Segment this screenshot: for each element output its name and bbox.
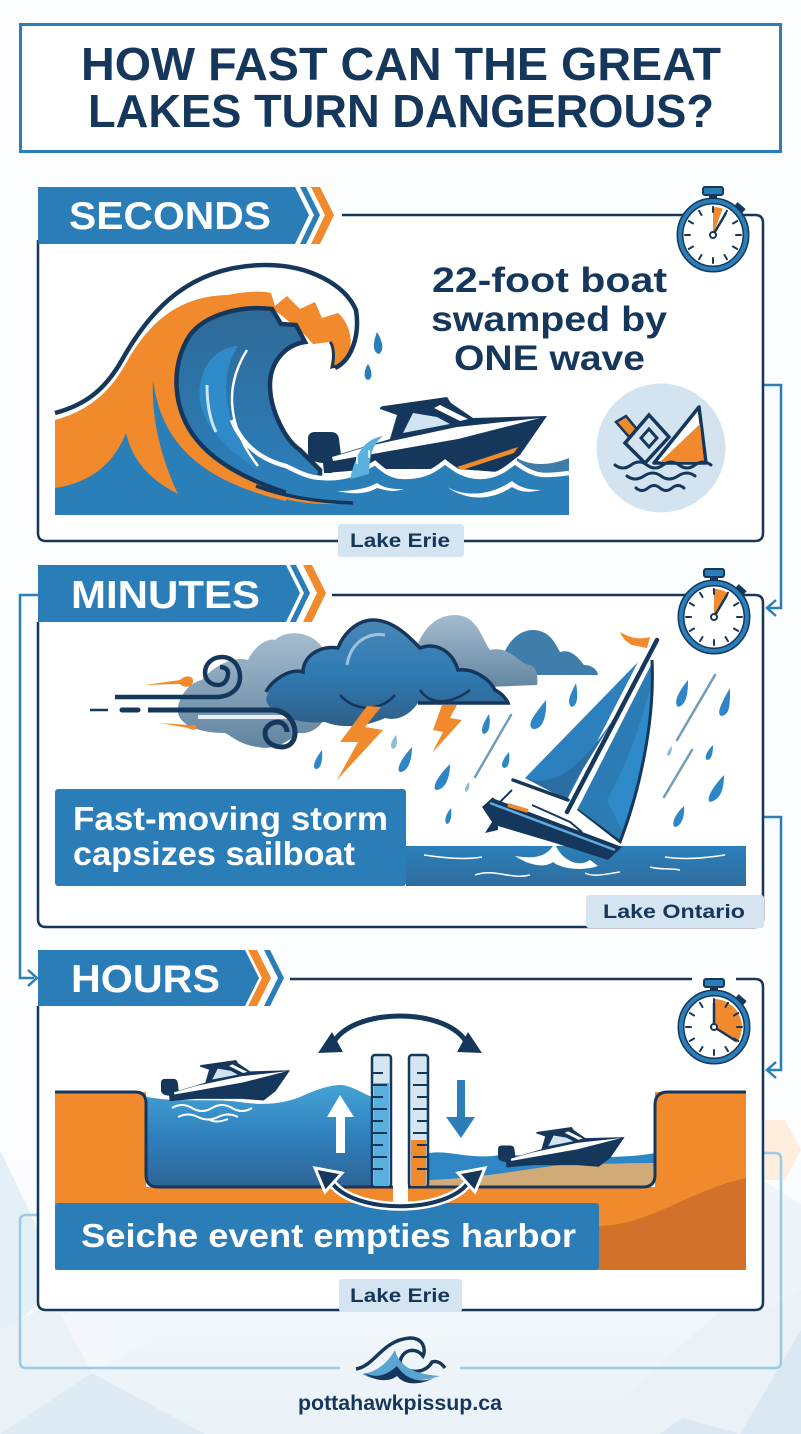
icon: boat high on the water: [161, 1060, 290, 1122]
title heading: [81, 38, 721, 137]
arrow: bottom double arc: [315, 1168, 485, 1206]
banner: seconds: SECONDS: [69, 195, 271, 238]
arrow: top double arc: [318, 1016, 482, 1053]
gauge: left high water: [372, 1055, 391, 1187]
text: 22-foot boat swamped: ONE wave: [454, 339, 645, 378]
panel: minutes: [38, 565, 764, 928]
callout: seiche event: [55, 1203, 599, 1270]
illustration: storm clouds and wind: [90, 615, 598, 748]
banner: minutes: MINUTES: [71, 574, 260, 617]
tag: Lake Erie: Lake Erie: [350, 531, 450, 552]
icon: lightning bolts: [337, 705, 462, 780]
tag: Lake Ontario: [586, 895, 764, 928]
chart: seiche harbor cross-section: [55, 1052, 746, 1270]
tag: Lake Erie: [338, 524, 464, 557]
background: pale low-poly facets: [0, 1120, 801, 1434]
callout: fast-moving storm: capsizes sailboat: [73, 835, 355, 872]
illustration: rain: [314, 675, 730, 827]
tag: Lake Erie: [339, 1279, 462, 1312]
icon: stopwatch minutes: [681, 569, 747, 651]
connector: seconds to minutes: [763, 385, 781, 616]
callout: fast-moving storm: [55, 789, 406, 886]
banner: seconds: [38, 187, 334, 244]
gauge: right low water: [409, 1055, 428, 1187]
title heading: HOW FAST CAN THE GREAT: [81, 38, 721, 90]
text: 22-foot boat swamped: [431, 261, 668, 378]
panel: hours: [38, 950, 763, 1312]
icon: boat stranded on the sand: [498, 1127, 625, 1167]
title heading: LAKES TURN DANGEROUS?: [88, 85, 714, 137]
title panel: [20, 24, 780, 152]
lake water strip: [406, 846, 746, 886]
arrow: down blue: [446, 1080, 475, 1138]
footer website: pottahawkpissup.ca: [298, 1392, 502, 1415]
footer logo: wave: [356, 1338, 445, 1383]
banner: hours: [38, 950, 284, 1006]
connector: minutes to hours right side: [763, 817, 781, 1078]
illustration: giant wave hitting boat: [55, 265, 569, 515]
panel: seconds: [38, 187, 763, 557]
tag: Lake Ontario: Lake Ontario: [603, 902, 745, 923]
icon: sinking boat: [596, 384, 726, 512]
banner: minutes: [38, 565, 326, 622]
icon: stopwatch seconds: [680, 187, 746, 269]
callout: fast-moving storm: Fast-moving storm: [73, 800, 388, 837]
tag: Lake Erie: Lake Erie: [350, 1286, 450, 1307]
connector: pale return line around the footer: [20, 1153, 781, 1368]
connector: minutes to hours: [20, 595, 38, 986]
text: 22-foot boat swamped: swamped by: [431, 300, 668, 339]
text: 22-foot boat swamped: 22-foot boat: [432, 261, 667, 300]
arrow: up white: [327, 1095, 354, 1153]
icon: stopwatch hours: [681, 975, 747, 1061]
callout: seiche event: Seiche event empties harbor: [81, 1217, 576, 1254]
banner: hours: HOURS: [71, 958, 220, 1001]
illustration: capsizing sailboat: [482, 632, 657, 869]
